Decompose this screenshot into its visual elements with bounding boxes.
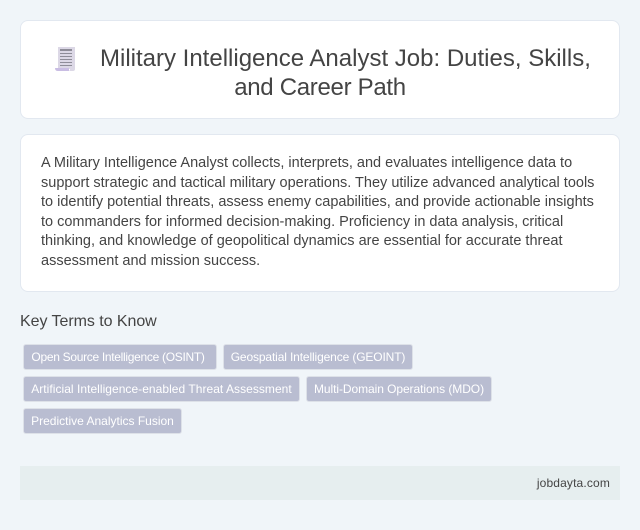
panel: description card <box>20 134 620 292</box>
tag: GEOINT: Geospatial Intelligence (GEOINT) <box>231 350 405 364</box>
panel: title card <box>20 20 620 119</box>
tag: MDO <box>306 376 492 402</box>
text block: description: to identify potential threats, assess enemy capabilities, and provide actionable insights <box>41 194 594 210</box>
footer bar <box>20 466 620 500</box>
text block: description: A Military Intelligence Analyst collects, interprets, and evaluates intelligence data to <box>41 155 572 171</box>
icon: scroll document <box>55 47 75 71</box>
heading: key terms: Key Terms to Know <box>20 313 157 330</box>
tag: GEOINT <box>223 344 413 370</box>
heading: title line 1: Military Intelligence Analyst Job: Duties, Skills, <box>100 45 591 72</box>
tag: OSINT <box>23 344 217 370</box>
tag: MDO: Multi-Domain Operations (MDO) <box>314 382 484 396</box>
footer: site name: jobdayta.com <box>537 476 610 490</box>
tag: AI threat assessment: Artificial Intelligence-enabled Threat Assessment <box>31 382 292 396</box>
text block: description: to commanders for informed decision-making. Proficiency in data analysis, critical <box>41 214 563 230</box>
text block: description <box>41 155 594 269</box>
text block: description: assessment and mission success. <box>41 253 260 269</box>
heading: title line 2: and Career Path <box>234 74 406 101</box>
tag: AI threat assessment <box>23 376 300 402</box>
text block: description: thinking, and knowledge of geopolitical dynamics are essential for accurate threat <box>41 233 562 249</box>
tag: OSINT: Open Source Intelligence (OSINT) <box>31 350 205 364</box>
tag: predictive analytics <box>23 408 182 434</box>
tag: predictive analytics: Predictive Analytics Fusion <box>31 414 174 428</box>
text block: description: support strategic and tactical military operations. They utilize advanced analytical tools <box>41 175 594 191</box>
